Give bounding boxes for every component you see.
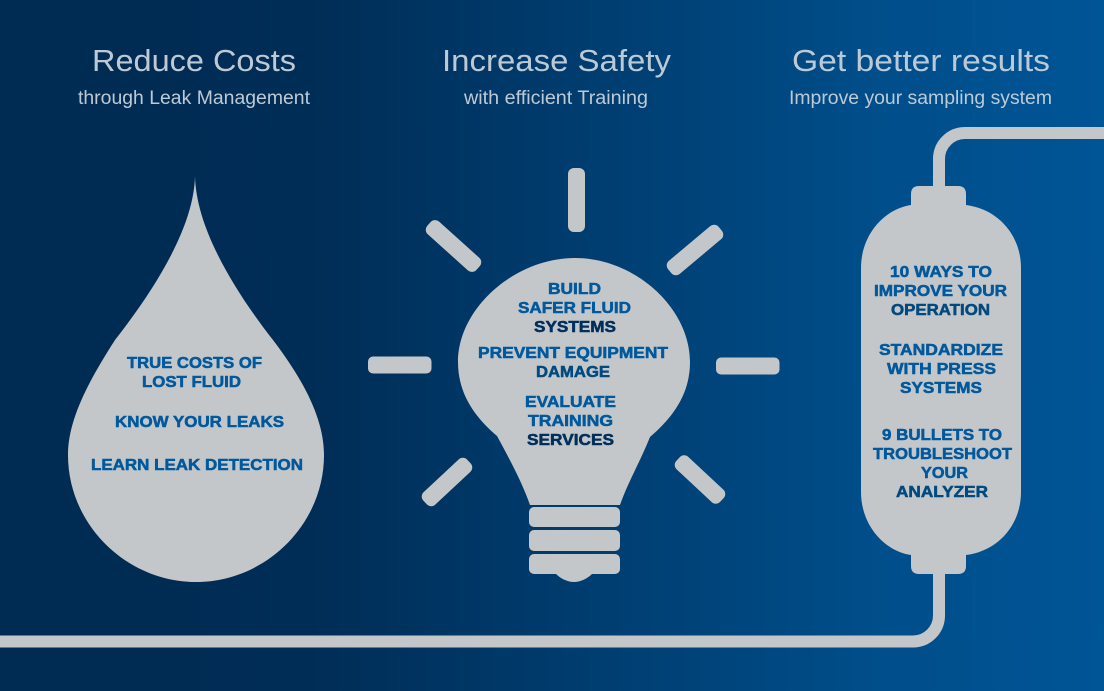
text: leak management topics: KNOW YOUR LEAKS [115, 414, 284, 431]
text: training topics: SAFER FLUID [518, 300, 631, 317]
text: sampling system topics [873, 264, 1012, 501]
text: leak management topics [91, 355, 303, 474]
heading: increase safety [442, 43, 672, 109]
panel: filter capsule [861, 186, 1021, 574]
text: leak management topics: TRUE COSTS OF [127, 355, 262, 372]
text: training topics: SERVICES [527, 432, 614, 449]
text: sampling system topics: 9 BULLETS TO [882, 427, 1002, 444]
heading: get better results: Improve your sampling system [789, 88, 1052, 109]
text: training topics: TRAINING [528, 413, 613, 430]
heading: increase safety: with efficient Training [463, 88, 648, 109]
text: sampling system topics: YOUR [921, 465, 968, 482]
text: sampling system topics: IMPROVE YOUR [874, 283, 1007, 300]
text: training topics: BUILD [548, 281, 601, 298]
text: sampling system topics: TROUBLESHOOT [873, 446, 1012, 463]
text: sampling system topics: 10 WAYS TO [890, 264, 992, 281]
text: training topics: DAMAGE [536, 364, 610, 381]
text: sampling system topics: SYSTEMS [900, 380, 982, 397]
text: training topics [478, 281, 668, 449]
panel: water drop [68, 176, 324, 582]
heading: reduce costs [78, 43, 311, 109]
heading: get better results: Get better results [792, 43, 1050, 78]
text: sampling system topics: WITH PRESS [887, 361, 996, 378]
text: sampling system topics: ANALYZER [896, 484, 988, 501]
heading: get better results [789, 43, 1052, 109]
icon: water drop [68, 176, 324, 582]
connecting tube [0, 133, 1104, 642]
heading: reduce costs: Reduce Costs [92, 43, 296, 78]
text: leak management topics: LEARN LEAK DETECTION [91, 457, 303, 474]
panel: light bulb [368, 168, 780, 582]
text: sampling system topics: OPERATION [891, 302, 990, 319]
text: leak management topics: LOST FLUID [142, 374, 241, 391]
text: sampling system topics: STANDARDIZE [879, 342, 1003, 359]
heading: reduce costs: through Leak Management [78, 88, 311, 109]
text: training topics: EVALUATE [525, 394, 616, 411]
icon: bulb screw base [529, 507, 620, 582]
icon: filter capsule [861, 186, 1021, 574]
icon: bulb rays [368, 168, 780, 509]
heading: increase safety: Increase Safety [442, 43, 672, 78]
text: training topics: PREVENT EQUIPMENT [478, 345, 668, 362]
icon: bulb glass [458, 258, 690, 505]
text: training topics: SYSTEMS [534, 319, 616, 336]
